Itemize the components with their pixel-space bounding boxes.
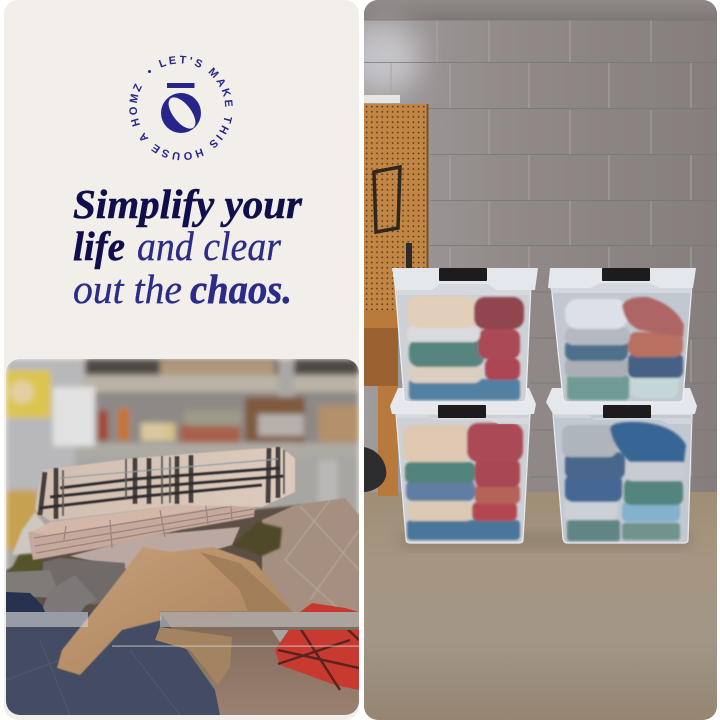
- white tuft at left: [12, 512, 45, 555]
- tan cloth seen through plastic: [155, 627, 232, 685]
- floor: [364, 492, 717, 720]
- navy quilt seams: [6, 640, 180, 715]
- tub lid notch: [555, 414, 692, 424]
- red plaid cloth top: [300, 603, 359, 612]
- title: Simplify your life and clear out the chaos: and clear: [137, 223, 282, 269]
- olive knit right of the blankets: [232, 522, 282, 556]
- tub latch: [602, 268, 650, 281]
- tub: lower right: [546, 388, 697, 543]
- photo: organised garage with stacked tubs: [349, 0, 717, 720]
- plaid thin lines: [63, 450, 284, 516]
- pegboard edge: [426, 104, 428, 310]
- tub latch: [439, 268, 487, 281]
- navy quilt inside tub: [6, 612, 220, 715]
- workbench top: [364, 310, 400, 328]
- tub body: [396, 414, 530, 543]
- panel: left cream card: [4, 0, 359, 720]
- tub lid: [548, 268, 696, 288]
- plaid blanket body: [35, 447, 295, 521]
- tub lid: [392, 268, 538, 290]
- logo bar: [167, 83, 194, 88]
- plaid vertical bands: [40, 447, 278, 519]
- olive knit left: [10, 552, 44, 572]
- pink blanket stripes: [34, 505, 254, 554]
- dim band behind tub rim on the right: [260, 612, 359, 630]
- pink blanket upper: [34, 504, 217, 535]
- tub body: [551, 284, 692, 402]
- storage tub rim right: [160, 612, 359, 627]
- shadow beneath tubs: [400, 532, 690, 548]
- photo: messy blankets in a storage tub: [6, 359, 359, 715]
- taupe checked cloth: [262, 498, 359, 612]
- logo dot: [148, 70, 151, 73]
- title: Simplify your life and clear out the chaos: chaos.: [190, 266, 292, 312]
- photo background: blurred garage shelves: [6, 359, 359, 715]
- plaid blue lines: [60, 459, 278, 478]
- red plaid lines: [278, 630, 359, 690]
- tool on pegboard: [406, 243, 412, 268]
- title: Simplify your life and clear out the chaos: out the: [73, 266, 182, 312]
- tan cloth top: [57, 547, 293, 675]
- tub body: [395, 284, 531, 402]
- tub: upper left: [392, 268, 538, 402]
- tub lid notch: [396, 284, 531, 295]
- logo: circular brand badge: [129, 56, 233, 160]
- folded clothes: [562, 422, 686, 541]
- white wall shelf: [364, 95, 400, 103]
- folded clothes: [407, 296, 524, 400]
- logo ring text: LET'S MAKE THIS HOUSE A HOMZ: [129, 56, 233, 160]
- mortar joints: [391, 20, 691, 477]
- workbench apron: [364, 328, 398, 386]
- grey fringed blanket: [6, 558, 126, 612]
- pegboard: [364, 104, 428, 310]
- tub line: [112, 646, 359, 647]
- tub lid notch: [396, 414, 530, 424]
- tub latch: [603, 405, 651, 418]
- red plaid inside tub: [275, 630, 359, 690]
- folded clothes: [565, 297, 684, 400]
- logo letter o: [161, 93, 201, 133]
- tan cloth fold: [200, 552, 293, 612]
- tub lid: [390, 388, 536, 414]
- title: Simplify your life and clear out the chaos: Simplify your: [73, 181, 303, 227]
- title: Simplify your life and clear out the chaos: [73, 181, 303, 312]
- horizontal joints: [364, 20, 717, 477]
- lower tan cloth inside tub: [160, 612, 359, 715]
- tub lid: [546, 388, 697, 414]
- tub lid notch: [550, 283, 692, 293]
- tool handle on pegboard: [374, 167, 400, 232]
- pink blanket lower: [28, 506, 256, 560]
- tub: upper right: [548, 268, 696, 402]
- wall: [364, 0, 717, 500]
- wall light glow: [349, 22, 421, 94]
- tub body: [553, 414, 692, 543]
- base under the pile: [6, 504, 359, 612]
- folded clothes: [403, 423, 523, 540]
- dark tyre: [364, 447, 386, 492]
- fringe under blankets: [70, 527, 240, 570]
- navy cloth at left: [6, 592, 45, 612]
- workbench leg: [378, 386, 398, 496]
- wall top band: [364, 0, 717, 20]
- plaid dark bands: [40, 468, 285, 508]
- storage tub rim left: [6, 612, 88, 627]
- tub latch: [438, 405, 486, 418]
- plaid blanket: [35, 447, 295, 521]
- title: Simplify your life and clear out the chaos: life: [73, 223, 125, 269]
- tub: lower left: [390, 388, 536, 543]
